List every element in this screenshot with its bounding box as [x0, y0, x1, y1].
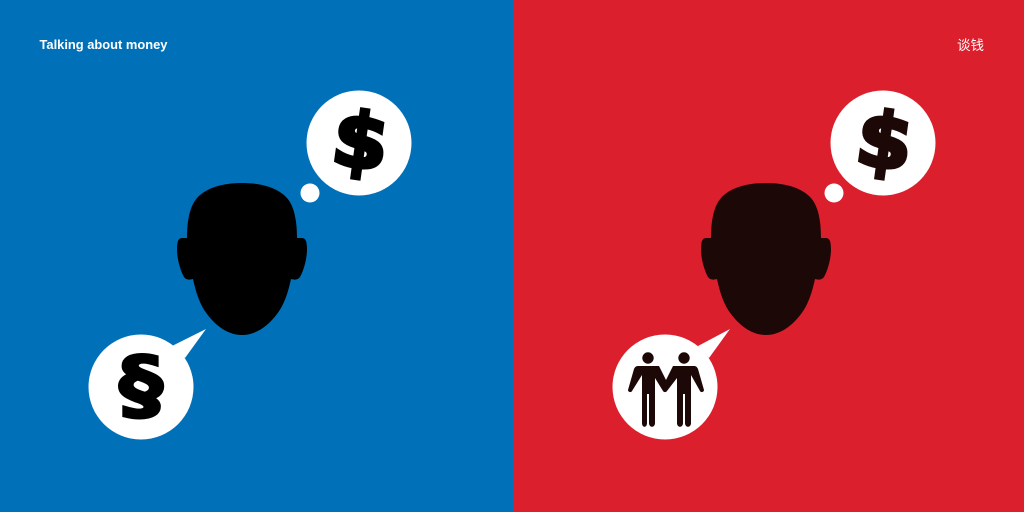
- thought bubble: dollar: $: [851, 95, 918, 189]
- panel: red right: [513, 0, 1024, 512]
- thought bubble: dollar: [300, 90, 412, 202]
- icon: two people: [628, 352, 704, 427]
- icon: head silhouette: [701, 183, 831, 335]
- thought bubble: dollar: $: [327, 95, 394, 189]
- heading: 谈钱: 谈钱: [957, 38, 984, 53]
- icon: head silhouette: [177, 183, 307, 335]
- thought bubble: dollar: [824, 90, 936, 202]
- heading: Talking about money: Talking about money: [40, 37, 168, 52]
- speech bubble: section sign: [88, 329, 206, 440]
- panel: blue left: [0, 0, 513, 512]
- speech bubble: section sign: §: [119, 341, 163, 430]
- speech bubble: two people holding hands: [612, 329, 730, 440]
